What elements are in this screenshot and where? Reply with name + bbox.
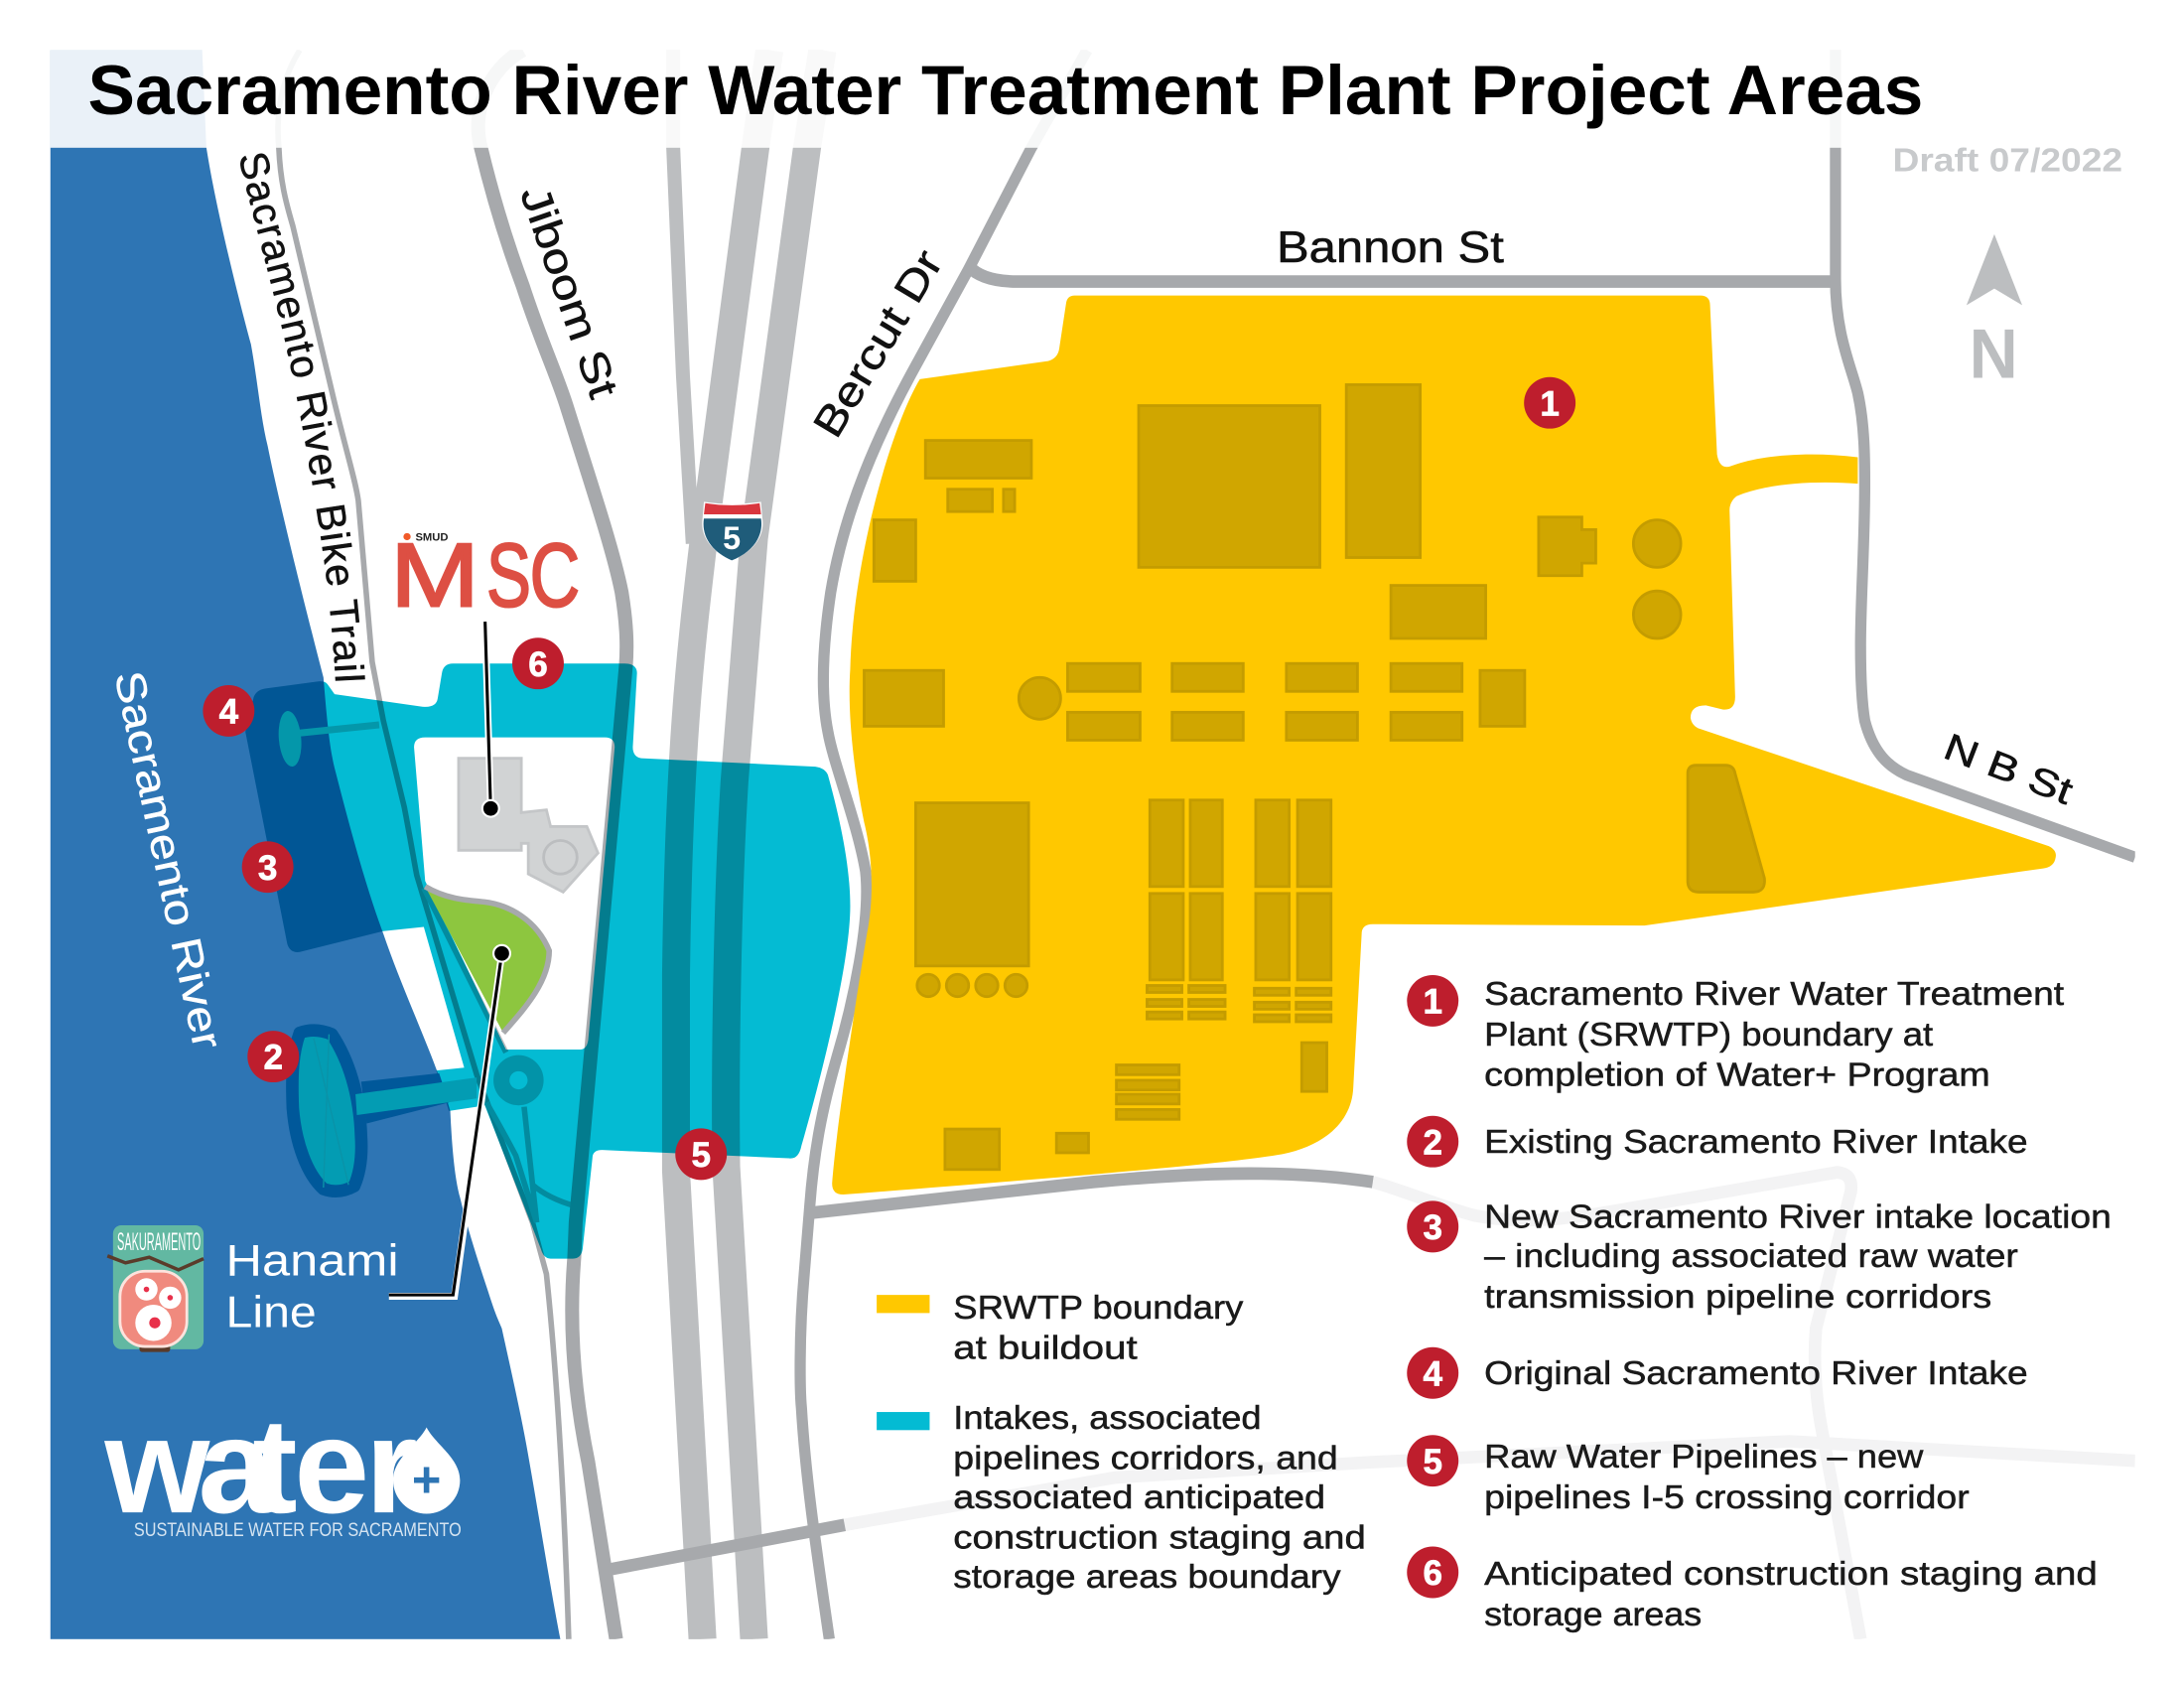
swatch: intakes xyxy=(877,1412,929,1430)
map badge 3: 3 xyxy=(258,849,277,888)
legend item 3: – including associated raw water xyxy=(1484,1237,2018,1274)
label: bercut dr: Bercut Dr xyxy=(804,242,952,445)
msc logo: S xyxy=(486,525,531,627)
water+ logo: + xyxy=(412,1452,441,1508)
river xyxy=(51,51,560,1639)
teal project area boundary xyxy=(245,663,850,1259)
msc building footprint xyxy=(459,759,598,892)
sacramento river bike trail line xyxy=(278,51,574,1639)
legend item 2: 2 xyxy=(1423,1123,1442,1162)
map badge 1: 1 xyxy=(1540,384,1560,423)
legend item 1 xyxy=(1407,975,2064,1093)
map badge 3 xyxy=(242,841,294,893)
text: intakes: Intakes, associated xyxy=(953,1399,1262,1436)
text: srwtp boundary: SRWTP boundary xyxy=(953,1289,1244,1326)
title: Sacramento River Water Treatment Plant Project Areas xyxy=(88,51,1923,129)
msc logo: M xyxy=(390,525,479,627)
legend item 1: Plant (SRWTP) boundary at xyxy=(1484,1016,1933,1053)
interstate 5 shield xyxy=(702,501,762,560)
legend item 6: storage areas xyxy=(1484,1596,1702,1632)
legend item 2 xyxy=(1407,1116,2028,1168)
green park outline xyxy=(425,887,549,1033)
label: sacramento river bike trail: Sacramento River Bike Trail xyxy=(240,153,365,681)
map badge 1 xyxy=(1524,377,1575,429)
text: intakes: pipelines corridors, and xyxy=(953,1440,1338,1477)
map badge 2: 2 xyxy=(264,1039,283,1077)
legend item 5: pipelines I-5 crossing corridor xyxy=(1484,1478,1970,1515)
lower road xyxy=(610,1525,845,1570)
map badge 6 xyxy=(512,637,564,689)
map badge 4 xyxy=(203,685,254,737)
legend item 4: 4 xyxy=(1423,1354,1442,1393)
map badge 5: 5 xyxy=(691,1136,711,1175)
text: srwtp boundary xyxy=(953,1289,1244,1366)
hanami line label xyxy=(226,1234,399,1336)
legend item 1: 1 xyxy=(1423,983,1442,1022)
map badge 2 xyxy=(247,1031,299,1082)
legend item 1: Sacramento River Water Treatment xyxy=(1484,975,2064,1012)
bannon st road xyxy=(969,266,1836,282)
jiboom st road xyxy=(478,51,626,1639)
draft date: Draft 07/2022 xyxy=(1892,143,2122,180)
legend item 3: transmission pipeline corridors xyxy=(1484,1278,1991,1315)
text: intakes: construction staging and xyxy=(953,1519,1366,1556)
legend item 6: 6 xyxy=(1423,1554,1442,1593)
legend item 3: New Sacramento River intake location xyxy=(1484,1198,2112,1235)
hanami line label: Line xyxy=(226,1286,317,1336)
interstate 5 shield: 5 xyxy=(723,520,741,556)
srwtp yellow boundary xyxy=(832,296,2056,1195)
msc logo: C xyxy=(530,525,580,627)
label: jiboom st: Jiboom St xyxy=(511,180,627,404)
leader line: hanami line xyxy=(389,945,510,1297)
map badge 6: 6 xyxy=(528,645,548,684)
text: srwtp boundary: at buildout xyxy=(953,1330,1138,1366)
legend: colour key xyxy=(877,1289,1366,1595)
legend item 6 xyxy=(1407,1547,2098,1632)
legend item 5: Raw Water Pipelines – new xyxy=(1484,1438,1924,1475)
south road xyxy=(813,1174,1373,1212)
green hanami park xyxy=(425,887,549,1033)
legend item 3 xyxy=(1407,1198,2112,1315)
text: SAKURAMENTO xyxy=(117,1228,201,1256)
water+ logo: SUSTAINABLE WATER FOR SACRAMENTO xyxy=(134,1520,462,1541)
label: n b st: N B St xyxy=(1938,726,2079,813)
swatch: srwtp boundary xyxy=(877,1295,929,1313)
legend item 1: completion of Water+ Program xyxy=(1484,1056,1990,1093)
north arrow: N xyxy=(1970,314,2018,392)
north arrow xyxy=(1967,234,2022,392)
legend item 5: 5 xyxy=(1423,1443,1442,1481)
msc logo xyxy=(390,525,580,627)
text: intakes: associated anticipated xyxy=(953,1478,1325,1515)
label: bannon st: Bannon St xyxy=(1277,221,1504,272)
leader line: msc xyxy=(482,622,499,817)
legend item 5 xyxy=(1407,1435,1970,1515)
faded roads xyxy=(845,1173,2135,1639)
legend item 2: Existing Sacramento River Intake xyxy=(1484,1123,2028,1160)
label: sacramento river: Sacramento River xyxy=(105,667,231,1053)
legend item 3: 3 xyxy=(1423,1208,1442,1247)
sakuramento badge xyxy=(107,1225,204,1352)
white overlay: title band xyxy=(50,50,1841,148)
existing river intake xyxy=(292,1031,544,1192)
interstate 5 roads xyxy=(673,51,822,1639)
original river intake xyxy=(276,710,379,768)
legend item 6: Anticipated construction staging and xyxy=(1484,1555,2098,1592)
hanami line label: Hanami xyxy=(226,1234,399,1285)
text: intakes: storage areas boundary xyxy=(953,1558,1341,1595)
bercut dr road xyxy=(800,51,1087,1639)
legend item 4: Original Sacramento River Intake xyxy=(1484,1354,2028,1391)
eastern road and n b st xyxy=(1836,51,2135,857)
msc logo: SMUD xyxy=(415,532,449,544)
plant buildings xyxy=(864,384,1764,1170)
map badge 4: 4 xyxy=(219,693,239,732)
map badge 5 xyxy=(675,1128,727,1180)
text: intakes xyxy=(953,1399,1366,1595)
numbered legend xyxy=(1407,975,2112,1632)
legend item 4 xyxy=(1407,1347,2028,1399)
water+ logo: water xyxy=(103,1390,418,1541)
